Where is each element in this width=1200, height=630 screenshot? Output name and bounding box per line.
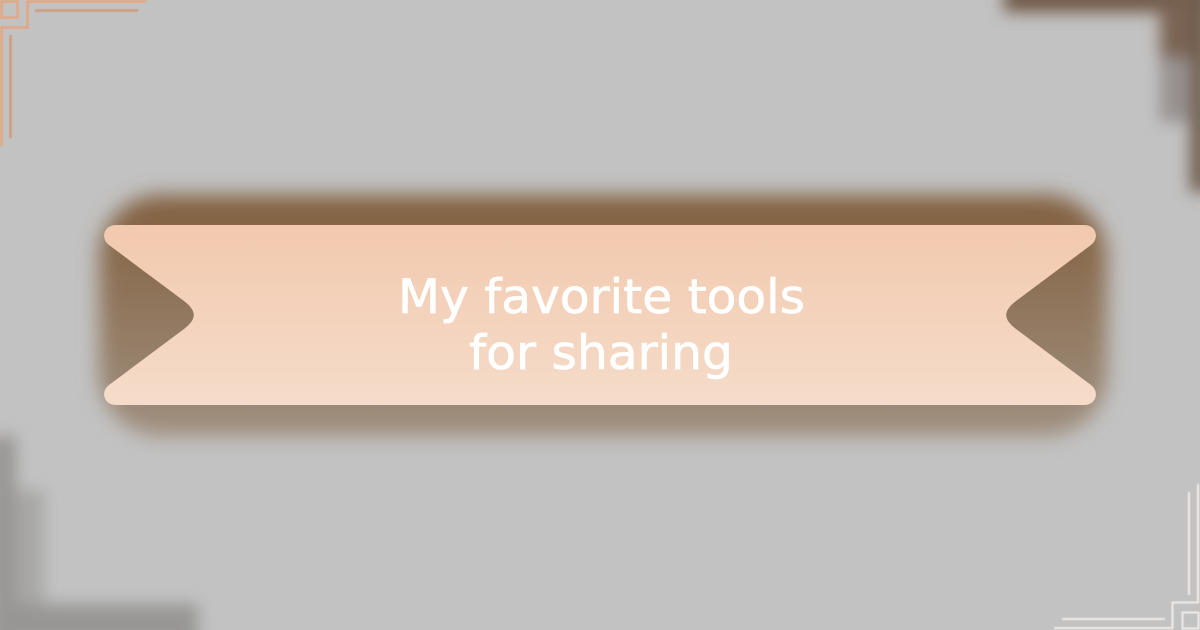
title line 2: for sharing <box>469 326 733 381</box>
ornament: top-left corner frame <box>2 2 146 146</box>
inner small square <box>2 2 18 18</box>
inner vertical line <box>1188 492 1190 595</box>
inner small square <box>1182 612 1198 628</box>
inner horizontal line <box>35 9 138 12</box>
ribbon banner <box>104 225 1096 405</box>
banner shadow <box>99 195 1107 436</box>
shadow: bottom-left corner <box>0 436 198 630</box>
title line 1: My favorite tools <box>398 270 805 325</box>
inner vertical line <box>9 35 12 138</box>
shadow: top-right corner <box>1004 0 1200 192</box>
outer frame line <box>1054 484 1198 628</box>
ornament: bottom-right corner frame <box>1054 484 1198 628</box>
title <box>398 270 805 381</box>
inner horizontal line <box>1062 618 1165 620</box>
outer frame line <box>2 2 146 146</box>
